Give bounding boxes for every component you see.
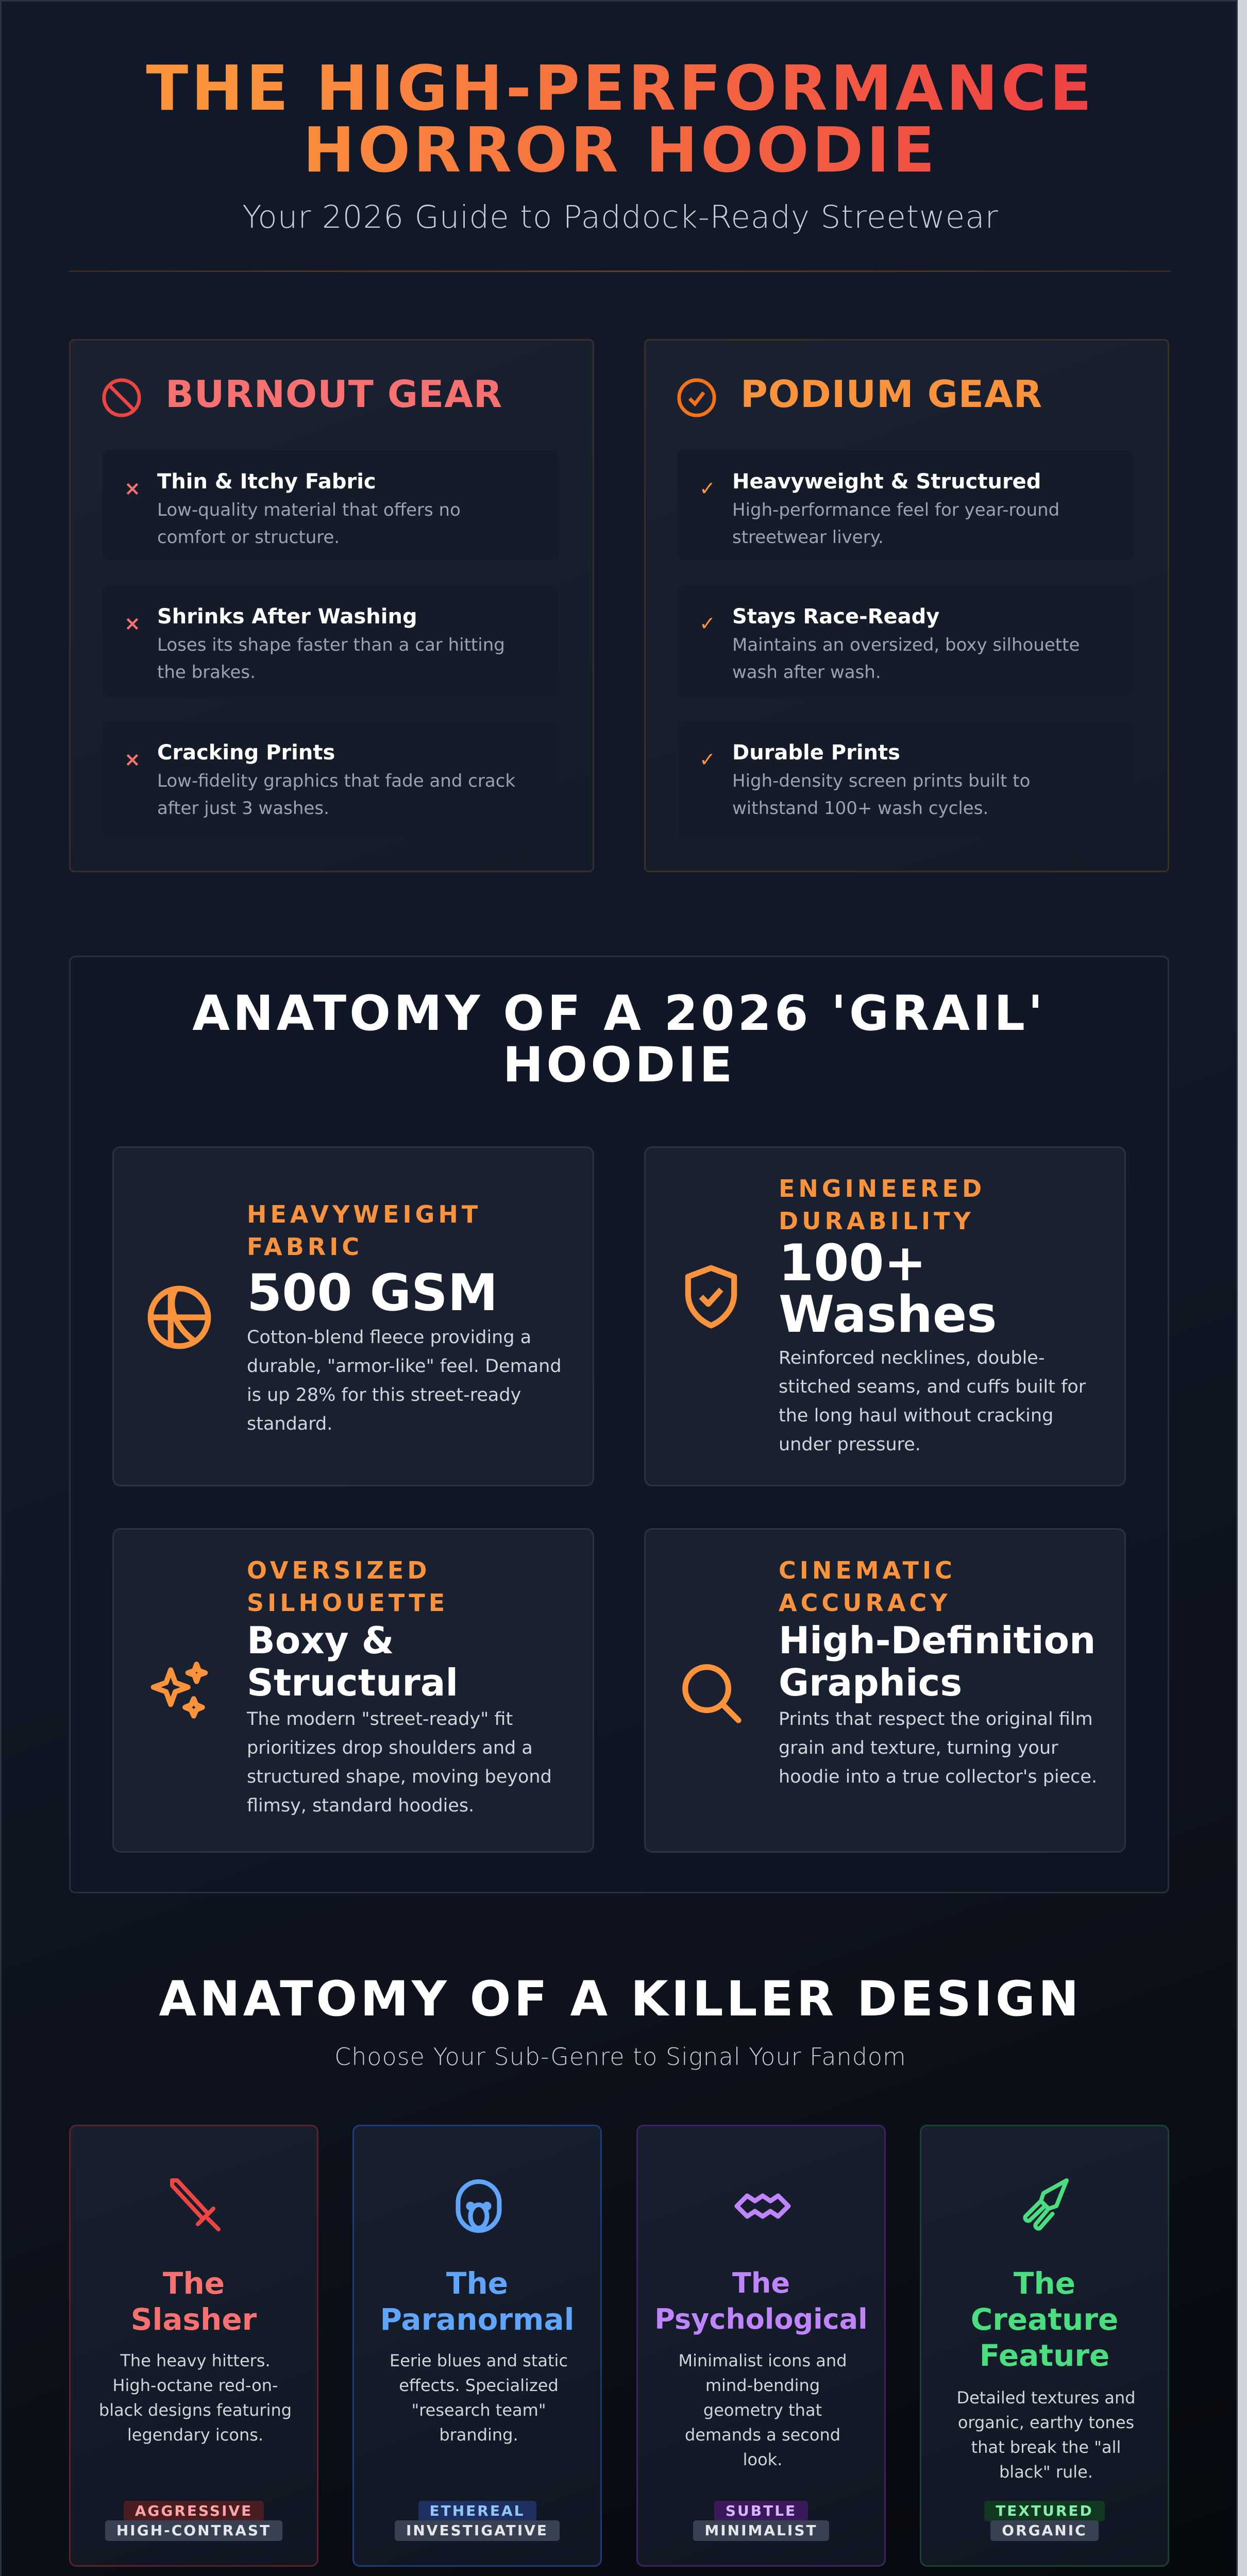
tags: ORGANIC: [1002, 2522, 1087, 2539]
card: psychological: [636, 2125, 886, 2567]
heading: grail hoodie: HOODIE: [503, 1037, 735, 1093]
heading: grail hoodie: [192, 986, 1046, 1093]
card: oversized silhouette: Boxy &: [247, 1619, 394, 1662]
item: durable prints: Durable Prints: [732, 741, 900, 765]
card: slasher: The: [163, 2266, 225, 2301]
item: thin fabric: Low-quality material that offers no comfort or structure.: [157, 500, 461, 548]
card: paranormal: Paranormal: [380, 2302, 575, 2337]
tags: [693, 2501, 829, 2541]
item: cracking prints: Low-fidelity graphics that fade and crack after just 3 washes.: [157, 771, 515, 819]
card: paranormal: [352, 2125, 602, 2567]
heading: killer design: ANATOMY OF A KILLER DESIGN: [159, 1971, 1082, 2027]
card: psychological: Minimalist icons and mind-bending geometry that demands a second look.: [678, 2351, 847, 2469]
item: durable prints: [678, 721, 1134, 839]
card: heavyweight fabric: FABRIC: [247, 1233, 363, 1261]
item: thin fabric: ×: [124, 477, 141, 500]
subtitle: Your 2026 Guide to Paddock-Ready Streetwear: [242, 199, 999, 235]
icon: ghost: [456, 2179, 502, 2233]
heading: burnout gear: BURNOUT GEAR: [165, 372, 502, 416]
card: psychological: The: [732, 2267, 790, 2299]
card: slasher: The heavy hitters. High-octane red-on-black designs featuring legendary icons.: [99, 2351, 292, 2445]
item: shrinks: ×: [124, 612, 141, 635]
tags: INVESTIGATIVE: [406, 2522, 548, 2539]
icon: wave: [735, 2193, 790, 2219]
heading: grail hoodie: ANATOMY OF A 2026 'GRAIL': [192, 986, 1046, 1042]
icon: globe: [147, 1286, 211, 1349]
card: oversized silhouette: SILHOUETTE: [247, 1589, 448, 1617]
tags: AGGRESSIVE: [135, 2502, 252, 2519]
card: paranormal: The: [446, 2266, 508, 2301]
tags: [105, 2501, 282, 2541]
item: race-ready: [678, 585, 1134, 698]
panel: burnout gear: [69, 339, 594, 872]
icon: check circle: [677, 378, 716, 417]
item: thin fabric: [103, 450, 559, 561]
item: race-ready: ✓: [699, 612, 716, 635]
title: HORROR HOODIE: [303, 115, 938, 187]
icon: sword: [170, 2178, 221, 2231]
icon: magnifier: [682, 1664, 742, 1723]
card: cinematic accuracy: Graphics: [779, 1661, 962, 1704]
item: shrinks: [103, 585, 559, 698]
icon: creature claw: [1023, 2178, 1069, 2231]
icon: sparkles: [150, 1662, 208, 1719]
icon: shield check: [685, 1265, 737, 1328]
item: heavyweight: High-performance feel for year-round streetwear livery.: [732, 500, 1059, 548]
card: engineered durability: 100+: [779, 1234, 926, 1293]
item: race-ready: Maintains an oversized, boxy silhouette wash after wash.: [732, 635, 1080, 683]
item: thin fabric: Thin & Itchy Fabric: [157, 470, 376, 494]
card: engineered durability: ENGINEERED: [779, 1175, 985, 1202]
item: shrinks: Shrinks After Washing: [157, 605, 417, 629]
card: heavyweight fabric: Cotton-blend fleece providing a durable, "armor-like" feel. Demand is up 28% for this street-ready standard.: [247, 1327, 562, 1434]
card: cinematic accuracy: High-Definition: [779, 1619, 1096, 1662]
card: oversized silhouette: Structural: [247, 1661, 458, 1704]
card: engineered durability: Reinforced necklines, double-stitched seams, and cuffs built for the long haul without cracking under pressure.: [779, 1348, 1086, 1455]
item: cracking prints: ×: [124, 748, 141, 771]
tags: [395, 2501, 560, 2541]
card: oversized silhouette: The modern "street-ready" fit prioritizes drop shoulders and a structured shape, moving beyond flimsy, standard hoodies.: [247, 1709, 552, 1816]
tags: MINIMALIST: [704, 2522, 818, 2539]
card: creature feature: Creature: [971, 2302, 1118, 2337]
card: creature feature: Detailed textures and organic, earthy tones that break the "all black" rule.: [956, 2388, 1136, 2482]
item: shrinks: Loses its shape faster than a car hitting the brakes.: [157, 635, 505, 683]
item: durable prints: ✓: [699, 748, 716, 771]
tags: TEXTURED: [996, 2502, 1093, 2519]
item: heavyweight: ✓: [699, 477, 716, 500]
card: engineered durability: [644, 1146, 1126, 1486]
tags: ETHEREAL: [430, 2502, 525, 2519]
item: cracking prints: [103, 721, 559, 839]
card: cinematic accuracy: [644, 1528, 1126, 1853]
title: THE HIGH-PERFORMANCE: [146, 53, 1095, 125]
tags: SUBTLE: [726, 2502, 797, 2519]
card: slasher: [69, 2125, 318, 2567]
card: oversized silhouette: [112, 1528, 594, 1853]
heading: podium gear: PODIUM GEAR: [740, 372, 1042, 416]
subheading: Choose Your Sub-Genre to Signal Your Fandom: [334, 2043, 906, 2071]
icon: prohibited: [102, 378, 141, 417]
card: creature feature: The: [1014, 2266, 1075, 2301]
card: creature feature: [920, 2125, 1169, 2567]
card: paranormal: Eerie blues and static effects. Specialized "research team" branding.: [390, 2351, 568, 2445]
tags: [984, 2501, 1105, 2541]
card: engineered durability: DURABILITY: [779, 1207, 974, 1235]
card: cinematic accuracy: ACCURACY: [779, 1589, 951, 1617]
panel: podium gear: [644, 339, 1169, 872]
card: slasher: Slasher: [131, 2302, 257, 2337]
item: durable prints: High-density screen prints built to withstand 100+ wash cycles.: [732, 771, 1030, 819]
card: creature feature: Feature: [980, 2338, 1109, 2373]
card: heavyweight fabric: 500 GSM: [247, 1264, 498, 1323]
card: psychological: Psychological: [654, 2303, 868, 2335]
card: oversized silhouette: OVERSIZED: [247, 1556, 431, 1584]
card: engineered durability: Washes: [779, 1285, 997, 1344]
item: heavyweight: [678, 450, 1134, 561]
card: heavyweight fabric: HEAVYWEIGHT: [247, 1200, 481, 1228]
item: cracking prints: Cracking Prints: [157, 741, 335, 765]
title: [2, 58, 1239, 182]
panel: grail hoodie anatomy: [69, 956, 1169, 1893]
item: heavyweight: Heavyweight & Structured: [732, 470, 1041, 494]
card: cinematic accuracy: CINEMATIC: [779, 1556, 956, 1584]
tags: HIGH-CONTRAST: [116, 2522, 271, 2539]
card: heavyweight fabric: [112, 1146, 594, 1486]
card: cinematic accuracy: Prints that respect the original film grain and texture, turning your hoodie into a true collector's piece.: [779, 1709, 1097, 1787]
item: race-ready: Stays Race-Ready: [732, 605, 939, 629]
